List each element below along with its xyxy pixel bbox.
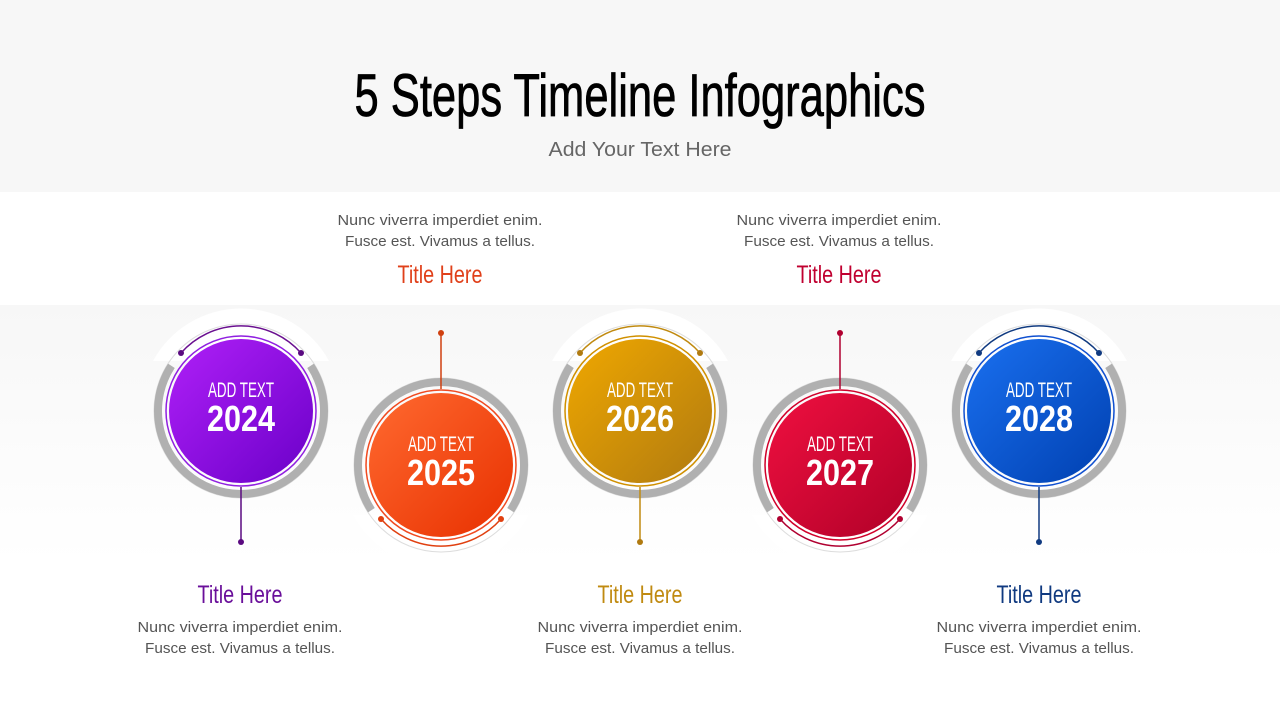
text block: step 3 (bottom): Nunc viverra imperdiet enim. [538,619,742,636]
text block: step 2 (top): Title Here [398,261,482,289]
step 2: 2025: ADD TEXT [408,433,474,456]
step 5: 2028: 2028 [1005,398,1073,439]
title: 5 Steps Timeline Infographics [354,62,926,129]
text block: step 1 (bottom): Title Here [198,581,282,609]
text block: step 1 (bottom) [138,581,342,657]
text block: step 1 (bottom): Fusce est. Vivamus a tellus. [145,640,335,657]
text block: step 3 (bottom): Fusce est. Vivamus a tellus. [545,640,735,657]
text block: step 5 (bottom): Fusce est. Vivamus a tellus. [944,640,1134,657]
step 5: 2028: ADD TEXT [1006,379,1072,402]
step 4: 2027: ADD TEXT [807,433,873,456]
step 2: 2025 [353,330,529,568]
text block: step 1 (bottom): Nunc viverra imperdiet enim. [138,619,342,636]
step 4: 2027: 2027 [806,452,874,493]
text block: step 5 (bottom): Title Here [996,581,1082,609]
text block: step 4 (top): Title Here [796,261,882,289]
step 3: 2026: ADD TEXT [607,379,673,402]
text block: step 2 (top): Fusce est. Vivamus a tellus. [345,233,535,250]
subtitle: Add Your Text Here [548,139,732,161]
step 3: 2026 [552,308,728,545]
text block: step 2 (top) [338,212,542,289]
step 4: 2027 [752,330,928,568]
step 3: 2026: 2026 [606,398,674,439]
step 1: 2024: 2024 [207,398,275,439]
text block: step 3 (bottom) [538,581,742,657]
text block: step 4 (top): Nunc viverra imperdiet enim. [736,212,942,229]
timeline band [0,305,1280,563]
header background [0,0,1280,192]
text block: step 5 (bottom): Nunc viverra imperdiet enim. [936,619,1142,636]
step 5: 2028 [951,308,1127,545]
text block: step 2 (top): Nunc viverra imperdiet enim. [338,212,542,229]
text block: step 4 (top): Fusce est. Vivamus a tellus. [744,233,934,250]
text block: step 4 (top) [736,212,942,289]
step 1: 2024 [153,308,329,545]
text block: step 5 (bottom) [936,581,1142,657]
text block: step 3 (bottom): Title Here [598,581,682,609]
step 1: 2024: ADD TEXT [208,379,274,402]
step 2: 2025: 2025 [407,452,475,493]
